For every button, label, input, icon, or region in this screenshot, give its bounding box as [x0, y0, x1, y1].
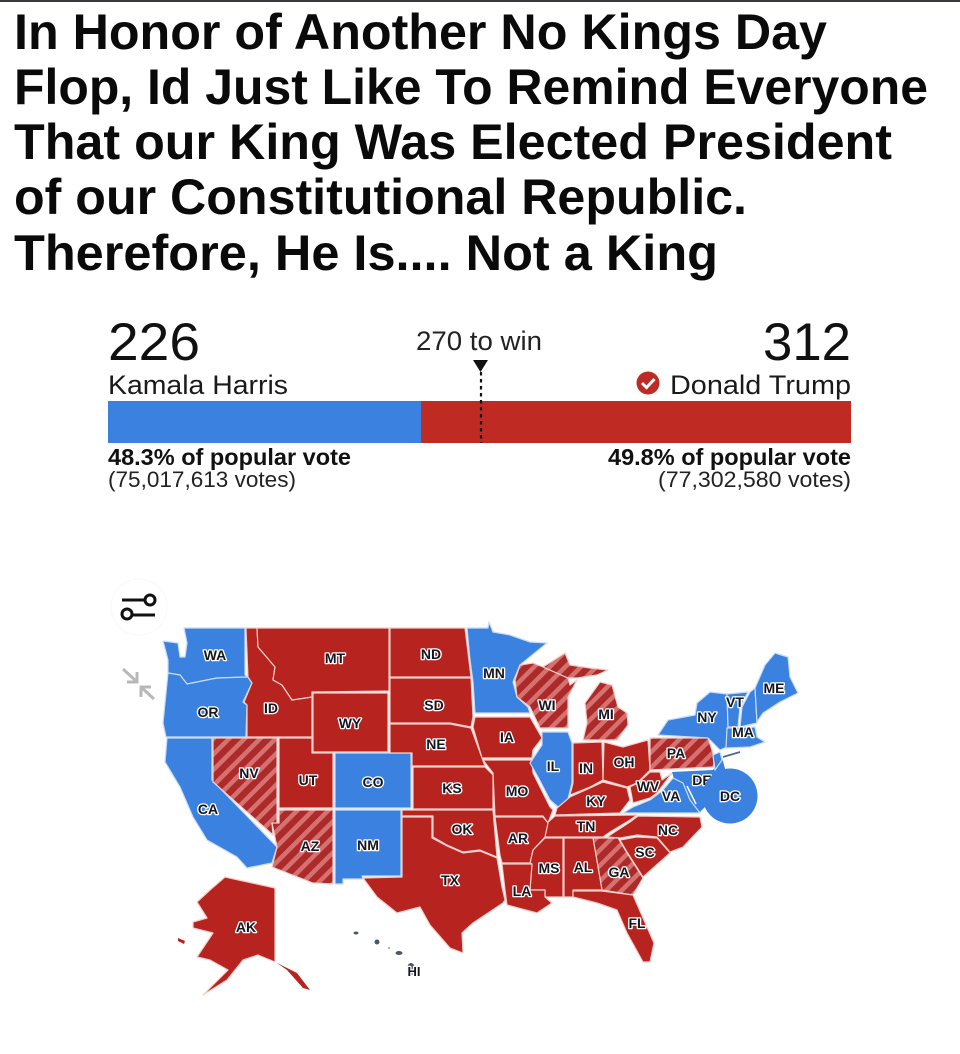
bar: Trump share — [421, 401, 851, 443]
state: NE — [390, 724, 485, 766]
Harris popular vote: 48.3% of popular vote — [108, 444, 351, 470]
state: VT: VT — [726, 694, 744, 710]
state: AR: AR — [508, 830, 528, 846]
state: KY: KY — [586, 793, 606, 809]
state: AZ — [272, 810, 333, 884]
state: ID: ID — [264, 700, 278, 716]
state: GA — [593, 838, 643, 895]
state: NC — [607, 816, 702, 852]
state: TN: TN — [577, 818, 595, 834]
Harris votes: (75,017,613 votes) — [108, 467, 296, 492]
state: HI — [354, 932, 420, 979]
state: MD and DE — [672, 758, 726, 812]
state: WY: WY — [339, 715, 362, 731]
state: HI: HI — [408, 964, 420, 979]
state: NE: NE — [426, 736, 446, 752]
title: In Honor of Another No Kings Day — [14, 4, 827, 60]
state: NH — [740, 688, 757, 727]
state: MI: MI — [598, 706, 614, 722]
icon: filter toggle button — [111, 579, 167, 635]
state: AK — [178, 877, 310, 995]
state: OR: OR — [198, 704, 218, 720]
state: VA: VA — [662, 788, 680, 804]
Trump name: Donald Trump — [670, 370, 851, 400]
state: OH: OH — [614, 754, 634, 770]
state: WV — [630, 772, 672, 803]
title: That our King Was Elected President — [14, 114, 892, 170]
state: NM — [335, 810, 401, 884]
state: KS — [413, 767, 493, 809]
state: NY: NY — [697, 709, 717, 725]
state: NM: NM — [357, 837, 379, 853]
state: MO — [483, 760, 553, 823]
state: AR — [495, 817, 548, 863]
state: ND: ND — [421, 646, 441, 662]
state: PA: PA — [667, 745, 685, 761]
state: WA — [163, 628, 248, 684]
state: CO: CO — [362, 774, 384, 790]
state: NC: NC — [658, 822, 678, 838]
callout: DC circle: DC — [720, 788, 740, 804]
270 to win label: 270 to win — [416, 326, 542, 356]
state: IA — [473, 717, 542, 758]
state: OH — [603, 740, 650, 787]
state: FL — [573, 891, 654, 962]
state: MA and southern New England — [726, 724, 765, 748]
state: UT: UT — [299, 772, 318, 788]
270 marker — [473, 360, 488, 443]
icon: collapse arrows — [123, 669, 154, 699]
state: LA: LA — [513, 883, 531, 899]
state: NY — [658, 692, 728, 750]
state: CA: CA — [198, 801, 218, 817]
state: ID — [244, 628, 312, 737]
title: Therefore, He Is.... Not a King — [14, 225, 718, 281]
callout: DC circle — [702, 768, 758, 824]
state: LA — [502, 864, 552, 913]
Trump votes: (77,302,580 votes) — [658, 467, 851, 492]
Harris electoral votes: 226 — [108, 313, 200, 372]
state: CO — [335, 753, 411, 808]
state: NV: NV — [239, 765, 259, 781]
state: MA and southern New England: MA — [732, 724, 754, 740]
state: TX: TX — [441, 872, 460, 888]
state: Long Island — [723, 752, 740, 757]
state: NJ — [713, 752, 722, 770]
state: MO: MO — [506, 783, 528, 799]
state: MN — [467, 622, 547, 713]
state: IN — [570, 742, 603, 795]
state: ME — [755, 653, 798, 722]
electoral map — [163, 622, 798, 995]
Trump popular vote: 49.8% of popular vote — [608, 444, 851, 470]
state: VT — [726, 692, 748, 727]
state: NV — [213, 738, 277, 835]
state: WI — [515, 663, 577, 728]
state: KS: KS — [442, 780, 462, 796]
state: IA: IA — [500, 729, 514, 745]
state: OK: OK — [452, 821, 472, 837]
state: OR — [163, 673, 252, 737]
state: MI — [543, 653, 628, 740]
state: MS: MS — [538, 860, 560, 876]
state: SD: SD — [424, 697, 444, 713]
state: WA: WA — [204, 647, 226, 663]
electoral vote scoreboard — [108, 313, 851, 492]
state: MN: MN — [483, 665, 505, 681]
state: MS — [530, 838, 563, 897]
state: WY — [313, 693, 388, 752]
state: AK: AK — [236, 919, 256, 935]
Harris name: Kamala Harris — [108, 370, 288, 400]
title: Flop, Id Just Like To Remind Everyone — [14, 59, 928, 115]
state: ND — [390, 628, 471, 677]
state: CA — [165, 738, 277, 868]
state: IL: IL — [547, 758, 560, 774]
icon: winner check — [636, 372, 660, 394]
state: MT — [257, 628, 389, 700]
title — [14, 4, 928, 281]
state: WV: WV — [637, 778, 660, 794]
state: WI: WI — [538, 697, 556, 713]
state: ME: ME — [764, 680, 784, 696]
state: AL: AL — [574, 859, 593, 875]
state: IL — [530, 732, 572, 807]
Trump electoral votes: 312 — [763, 313, 851, 372]
state: SC: SC — [635, 844, 655, 860]
title: of our Constitutional Republic. — [14, 169, 747, 225]
state: OK — [402, 810, 497, 857]
state: KY — [555, 782, 630, 815]
bar: Harris share — [108, 401, 421, 443]
state: GA: GA — [608, 864, 630, 880]
state: FL: FL — [628, 915, 646, 931]
state: AZ: AZ — [301, 838, 320, 854]
state: AL — [564, 838, 602, 897]
state: MD and DE: DE — [692, 772, 712, 788]
state: VA — [623, 778, 700, 813]
state: UT — [279, 738, 333, 808]
state: TX — [363, 817, 505, 953]
state: IN: IN — [579, 760, 593, 776]
state: TN — [543, 815, 637, 837]
state: MT: MT — [325, 650, 346, 666]
state: SD — [390, 678, 473, 727]
state: PA — [650, 738, 714, 770]
state: SC — [620, 837, 670, 877]
